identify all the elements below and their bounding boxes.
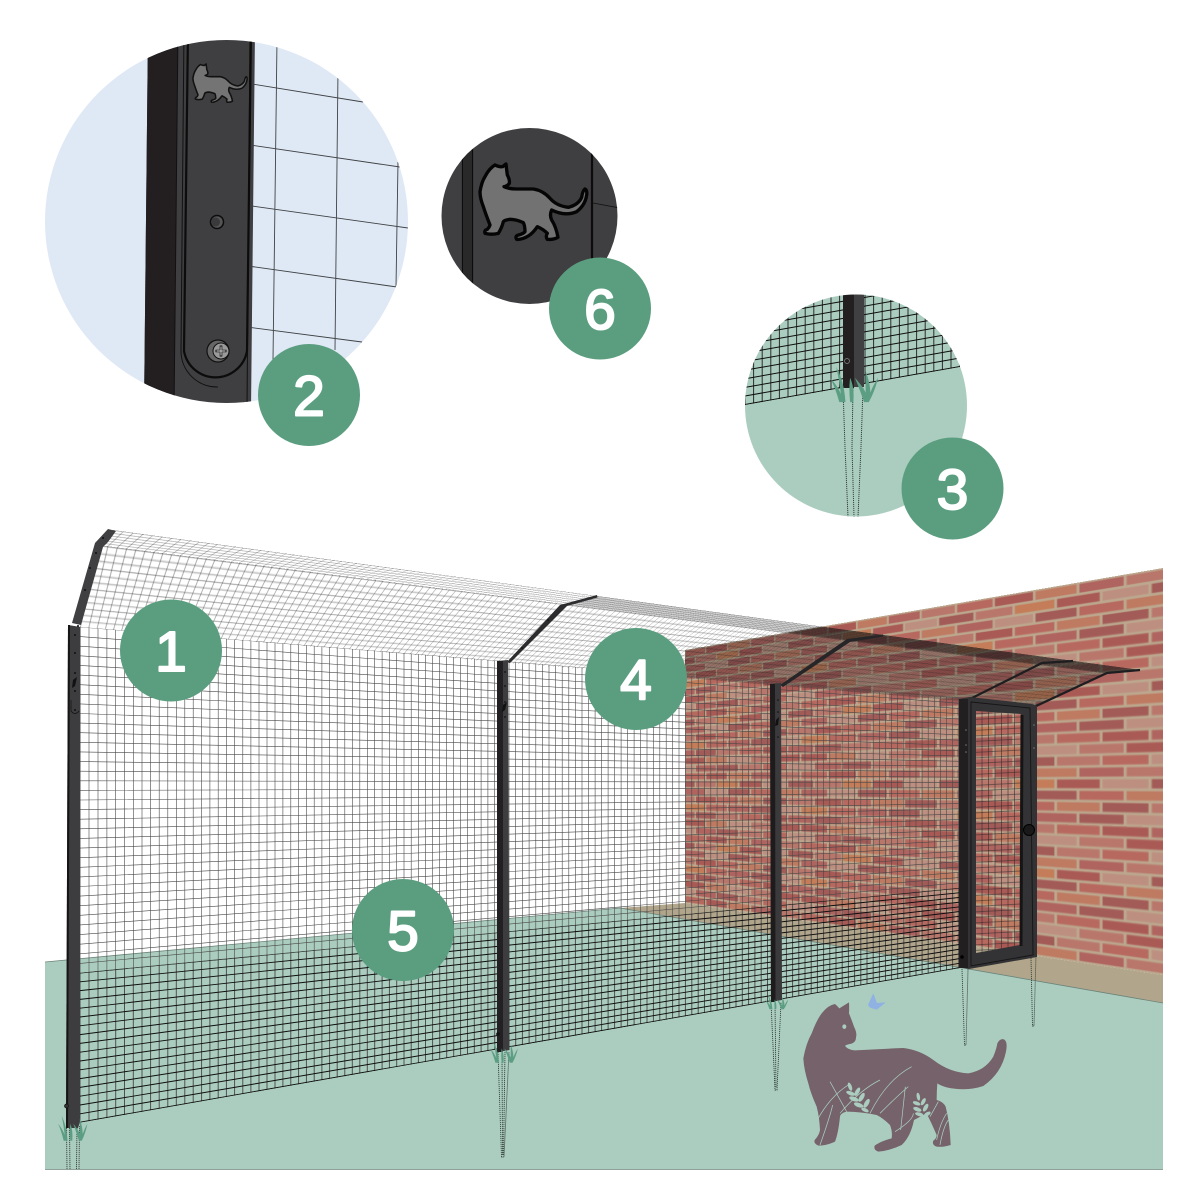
lower fence net: [80, 888, 960, 1122]
roof net lower plane: [80, 546, 1105, 705]
badge 6: 6: [584, 278, 616, 342]
badge 1: 1: [155, 620, 187, 684]
badge 5: [352, 879, 454, 981]
badge 2: [258, 344, 360, 446]
butterfly: [868, 994, 885, 1009]
large cat logo: [480, 164, 587, 239]
stakes: [843, 388, 863, 517]
detail circle: top bracket: [45, 30, 408, 410]
door and door post: [959, 661, 1140, 969]
door handle: [1024, 824, 1034, 836]
badge 4: [585, 628, 687, 730]
badge 6: [549, 258, 651, 360]
cat silhouette: [803, 1002, 1007, 1152]
badge 4: 4: [620, 648, 652, 712]
post 1 with arm: [64, 529, 116, 1128]
badge 3: [902, 438, 1004, 540]
door frame: [959, 697, 1037, 969]
cat eye: [842, 1024, 846, 1029]
detail circle: cat logo: [442, 120, 620, 310]
net: [745, 294, 960, 405]
screw: [207, 340, 229, 362]
grass: [830, 367, 878, 402]
net grid: [247, 40, 408, 360]
door post arms: [970, 661, 1140, 707]
post body: [144, 30, 255, 410]
badge 5: 5: [387, 900, 419, 964]
upper fence net: [80, 627, 960, 973]
roof net upper plane: [106, 530, 1134, 672]
badge 1: [120, 600, 222, 702]
grass tufts: [58, 995, 788, 1141]
grass inside cat: [817, 1067, 948, 1145]
post: [843, 290, 854, 388]
door mesh: [976, 711, 1021, 953]
brick wall: [685, 568, 1163, 975]
wheat ears: [846, 1082, 931, 1117]
badge 3: 3: [937, 458, 968, 522]
post 3 with arm: [770, 634, 884, 1002]
badge 2: 2: [293, 364, 325, 428]
bracket hole: [210, 216, 224, 228]
post 2 with arm: [496, 595, 598, 1052]
detail circle: ground anchor: [745, 294, 967, 516]
small cat logo: [193, 64, 247, 102]
ground stakes: [66, 955, 1036, 1169]
bracket plate: [184, 30, 251, 377]
